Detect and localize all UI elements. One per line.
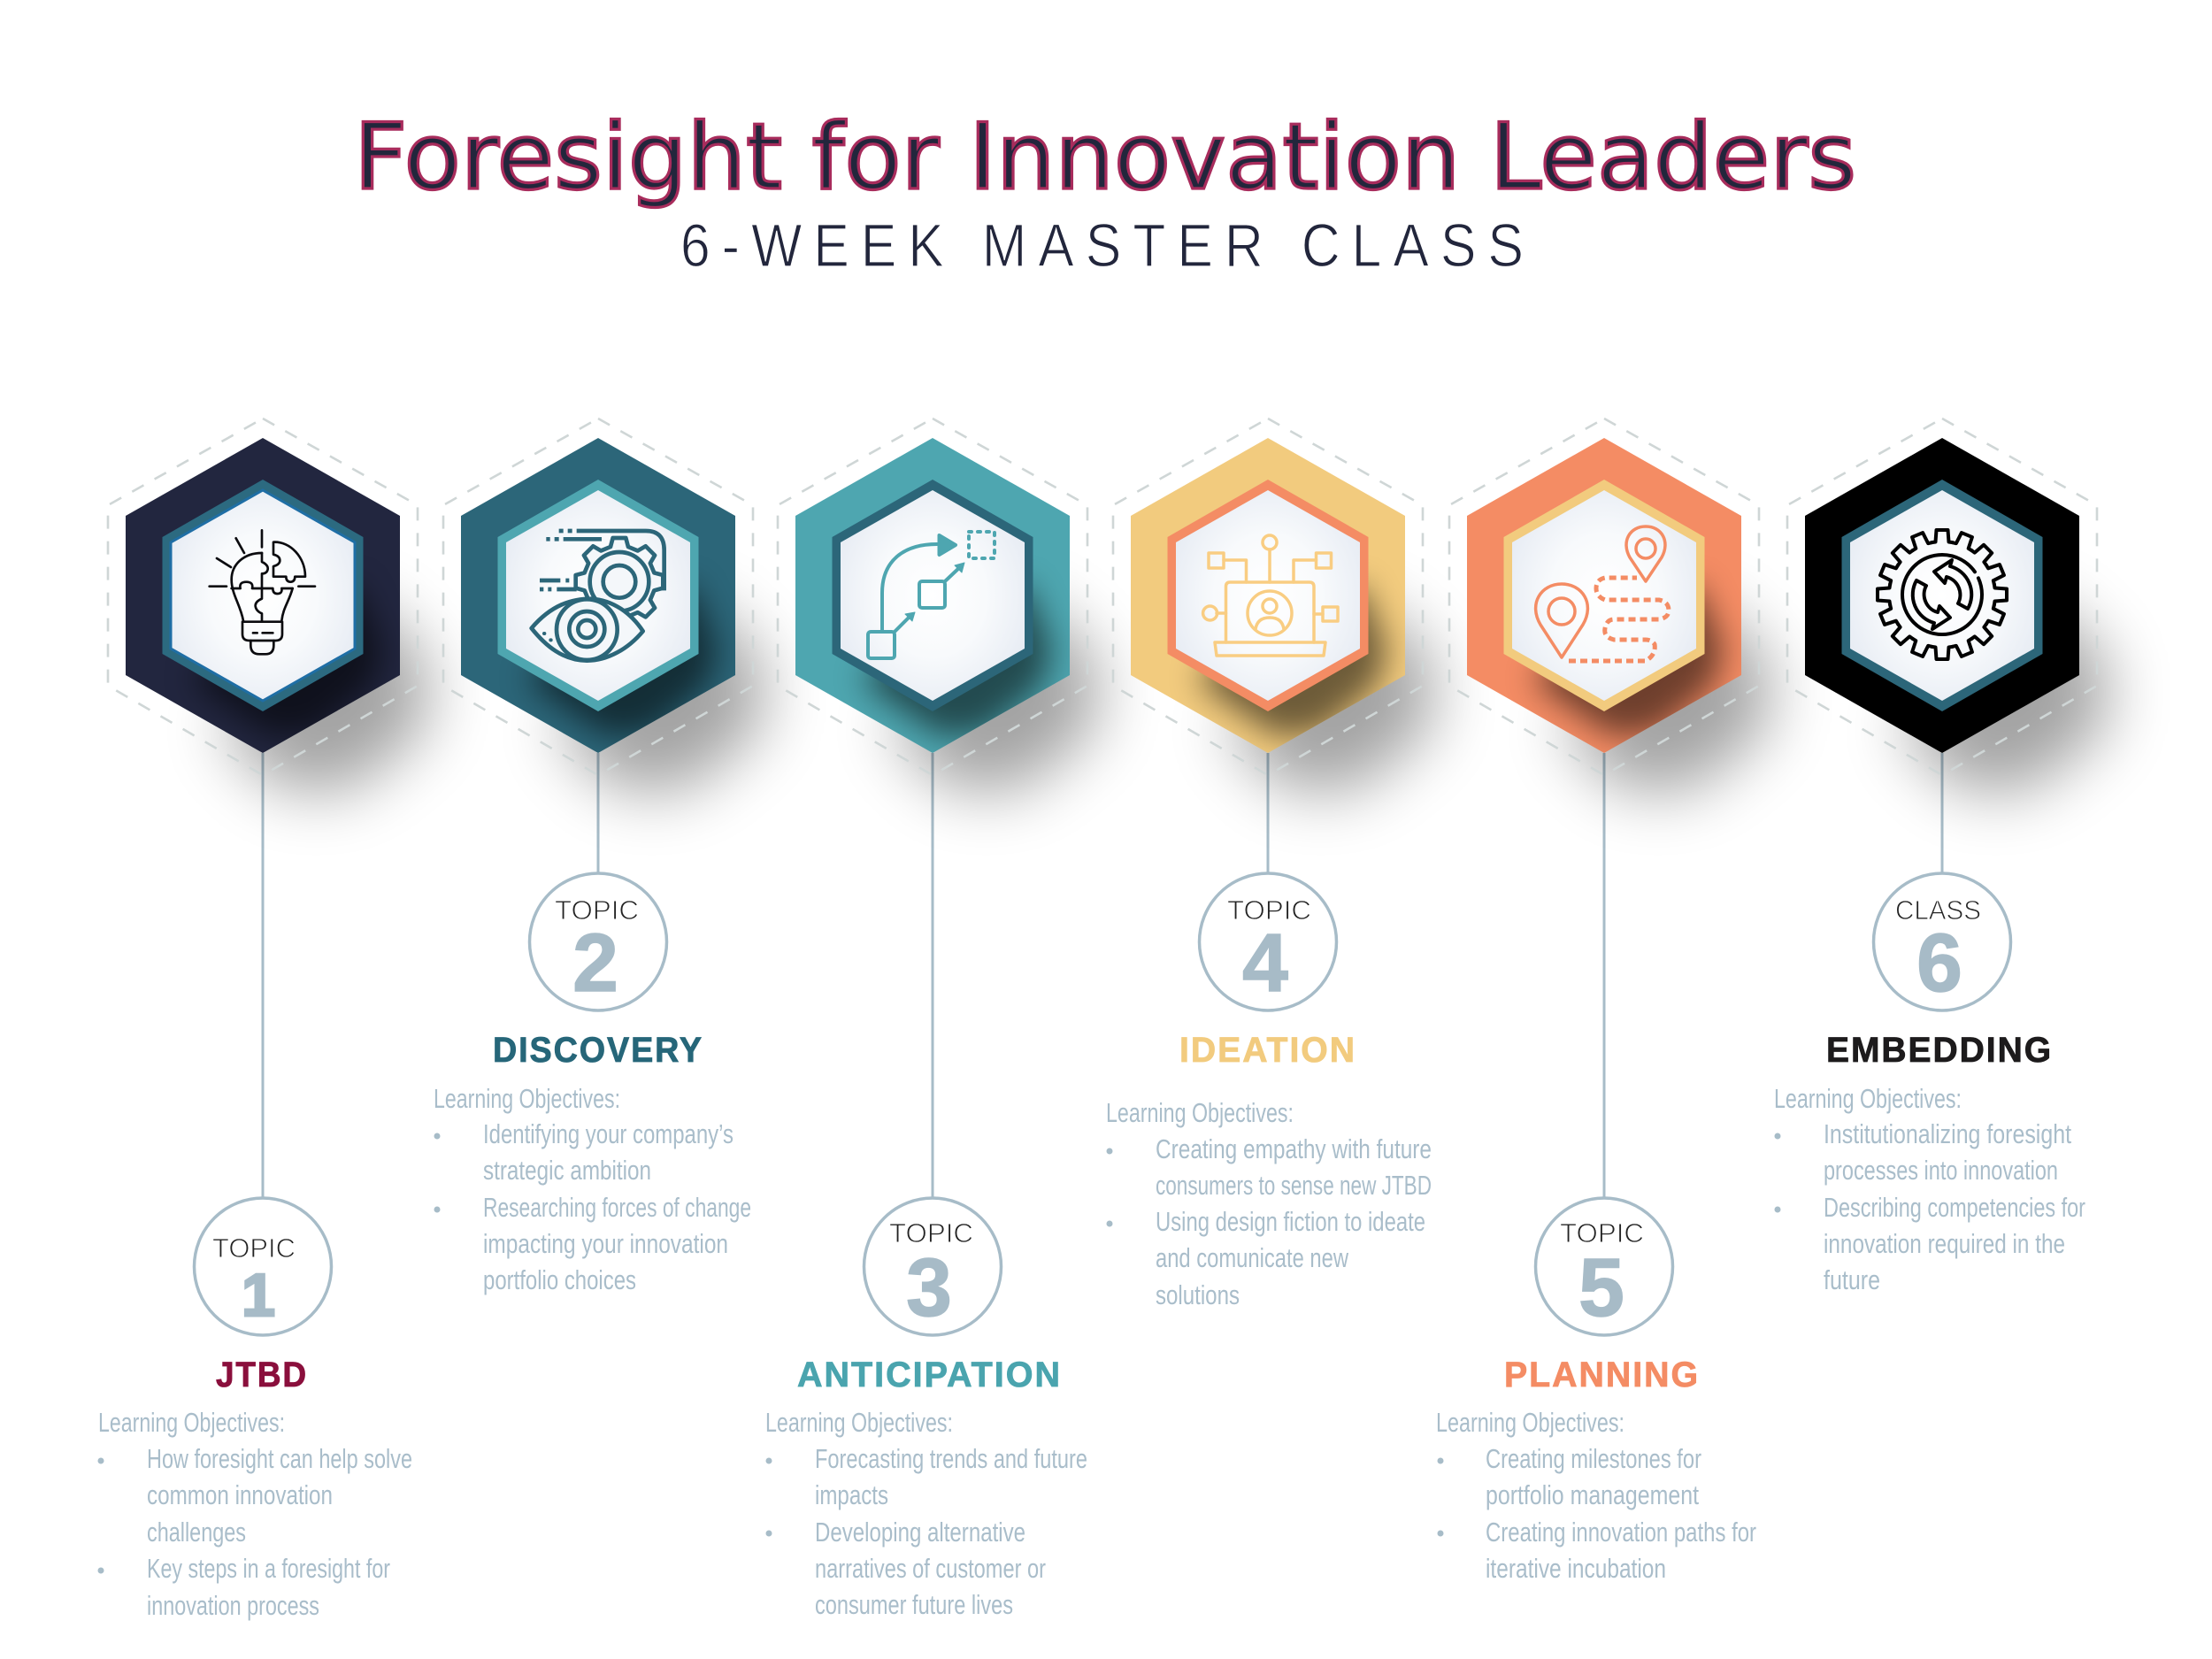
learning objectives 1: Learning Objectives: — [98, 1407, 285, 1438]
panel: class 6 Embedding — [1774, 419, 2106, 1295]
learning objectives 3: Developing alternative — [815, 1517, 1025, 1548]
learning objectives 6 — [1774, 1083, 2085, 1295]
learning objectives 5: Creating innovation paths for — [1486, 1517, 1756, 1548]
learning objectives 2: Identifying your company’s — [483, 1118, 733, 1149]
learning objectives 3: consumer future lives — [815, 1589, 1013, 1620]
hexagon 3 — [778, 419, 1096, 790]
hexagon 5 — [1449, 419, 1768, 790]
learning objectives 2 — [434, 1083, 751, 1295]
badge: class 6: CLASS — [1895, 895, 1981, 926]
panel: topic 3 Anticipation — [765, 419, 1096, 1620]
learning objectives 4: Creating empathy with future — [1156, 1133, 1432, 1164]
heading: JTBD: JTBD — [216, 1356, 308, 1394]
badge: topic 4: TOPIC — [1227, 895, 1311, 926]
learning objectives 1: innovation process — [147, 1590, 319, 1621]
connector line 4 — [1267, 753, 1269, 874]
badge: topic 5 — [1536, 1198, 1672, 1335]
learning objectives 6: Learning Objectives: — [1774, 1083, 1962, 1114]
learning objectives 5: Creating milestones for — [1486, 1443, 1701, 1474]
icon: puzzle light bulb — [210, 530, 315, 654]
badge: topic 5: 5 — [1578, 1241, 1624, 1333]
learning objectives 1: common innovation — [147, 1479, 333, 1510]
learning objectives 4 — [1106, 1097, 1432, 1310]
learning objectives 3: narratives of customer or — [815, 1553, 1046, 1584]
learning objectives 6: innovation required in the — [1824, 1228, 2065, 1259]
badge: topic 1 — [195, 1198, 331, 1335]
hexagon 4 — [1113, 419, 1432, 790]
learning objectives 2: portfolio choices — [483, 1264, 636, 1295]
connector line 3 — [931, 753, 934, 1199]
subtitle: 6-WEEK MASTER CLASS — [680, 211, 1535, 280]
learning objectives 1 — [97, 1407, 412, 1621]
badge: topic 3: TOPIC — [889, 1217, 973, 1248]
learning objectives 5: Learning Objectives: — [1436, 1407, 1624, 1438]
badge: topic 3: 3 — [906, 1241, 952, 1333]
badge: topic 2: 2 — [572, 917, 618, 1009]
panel: topic 4 Ideation — [1106, 419, 1432, 1310]
learning objectives 3: impacts — [815, 1479, 888, 1510]
learning objectives 4: solutions — [1156, 1279, 1240, 1310]
learning objectives 2: strategic ambition — [483, 1155, 651, 1186]
badge: topic 1: TOPIC — [212, 1233, 296, 1263]
badge: topic 1: 1 — [242, 1262, 275, 1329]
learning objectives 6: Institutionalizing foresight — [1824, 1118, 2071, 1149]
icon: map pins and route — [1536, 526, 1669, 661]
connector line 6 — [1941, 753, 1943, 874]
learning objectives 6: Describing competencies for — [1824, 1192, 2085, 1223]
panel: topic 1 JTBD — [97, 419, 426, 1621]
hexagon 2 — [443, 419, 762, 790]
hexagon 1 — [108, 419, 426, 790]
heading: Planning: PLANNING — [1504, 1356, 1700, 1394]
hexagon 6 — [1787, 419, 2106, 790]
learning objectives 2: impacting your innovation — [483, 1228, 728, 1259]
title: Foresight for Innovation Leaders — [354, 104, 1856, 211]
learning objectives 3: Learning Objectives: — [765, 1407, 953, 1438]
connector line 5 — [1603, 753, 1605, 1199]
heading: Embedding: EMBEDDING — [1826, 1031, 2053, 1070]
heading: Discovery: DISCOVERY — [493, 1031, 703, 1070]
badge: class 6: 6 — [1916, 917, 1962, 1009]
learning objectives 5 — [1436, 1407, 1756, 1584]
icon: gear with refresh arrows — [1878, 530, 2007, 659]
learning objectives 5: portfolio management — [1486, 1479, 1699, 1510]
learning objectives 4: and comunicate new — [1156, 1242, 1348, 1273]
learning objectives 4: Learning Objectives: — [1106, 1097, 1294, 1128]
learning objectives 4: Using design fiction to ideate — [1156, 1206, 1425, 1237]
learning objectives 2: Learning Objectives: — [434, 1083, 620, 1114]
badge: class 6 — [1874, 873, 2010, 1010]
badge: topic 3 — [864, 1198, 1002, 1335]
learning objectives 3: Forecasting trends and future — [815, 1443, 1087, 1474]
connector line 1 — [262, 753, 264, 1199]
learning objectives 1: How foresight can help solve — [147, 1443, 412, 1474]
panel: topic 2 Discovery — [434, 419, 762, 1295]
badge: topic 4 — [1200, 873, 1336, 1010]
badge: topic 2 — [529, 873, 667, 1010]
learning objectives 4: consumers to sense new JTBD — [1156, 1170, 1432, 1201]
badge: topic 2: TOPIC — [555, 895, 639, 926]
badge: topic 4: 4 — [1242, 917, 1288, 1009]
connector line 2 — [596, 753, 600, 874]
panel: topic 5 Planning — [1436, 419, 1768, 1584]
learning objectives 1: Key steps in a foresight for — [147, 1553, 390, 1584]
icon: eye and gear — [532, 531, 664, 661]
learning objectives 2: Researching forces of change — [483, 1192, 751, 1223]
icon: path with arrows — [868, 532, 995, 658]
heading: Ideation: IDEATION — [1179, 1031, 1356, 1070]
learning objectives 5: iterative incubation — [1486, 1553, 1666, 1584]
icon: laptop with person and nodes — [1203, 535, 1338, 656]
heading: Anticipation: ANTICIPATION — [797, 1356, 1062, 1394]
learning objectives 1: challenges — [147, 1517, 246, 1548]
learning objectives 6: future — [1824, 1264, 1880, 1295]
learning objectives 3 — [765, 1407, 1087, 1620]
badge: topic 5: TOPIC — [1560, 1217, 1644, 1248]
learning objectives 6: processes into innovation — [1824, 1155, 2058, 1186]
